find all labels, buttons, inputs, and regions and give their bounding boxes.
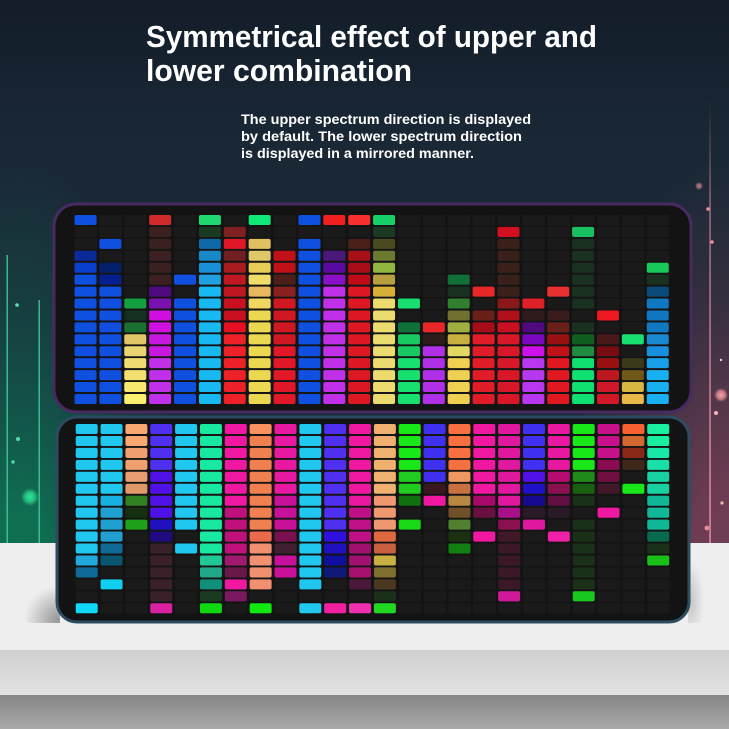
lower spectrum bars xyxy=(76,424,669,613)
title: Symmetrical effect of upper and xyxy=(146,19,597,54)
panel: lower mirrored spectrum display xyxy=(57,417,689,622)
left light streaks and particles xyxy=(6,255,40,543)
title xyxy=(146,19,597,88)
description text: The upper spectrum direction is displayed xyxy=(241,111,531,127)
description text: is displayed in a mirrored manner. xyxy=(241,145,474,161)
panel: upper spectrum display xyxy=(54,204,691,412)
upper spectrum bars xyxy=(74,215,669,404)
description text xyxy=(241,111,531,161)
title: lower combination xyxy=(146,53,412,88)
description text: by default. The lower spectrum direction xyxy=(241,128,522,144)
right light streak and particles xyxy=(695,100,728,543)
white shelf xyxy=(0,543,729,729)
